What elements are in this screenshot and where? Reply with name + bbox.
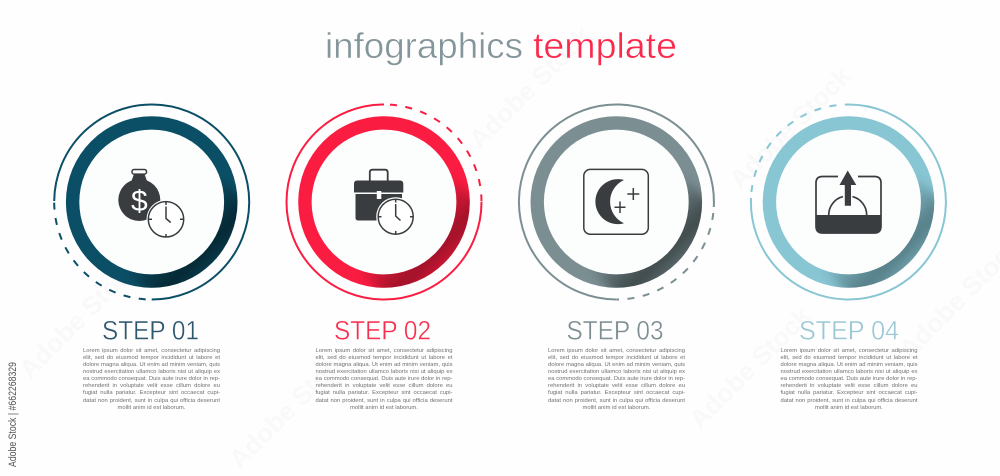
icon: gauge with up arrow [816, 170, 881, 233]
text block: step 03: nostrud exercitation ullamco laboris nisi ut aliquip ex [548, 369, 685, 375]
text block: step 04: mollit anim id est laborum. [815, 405, 883, 411]
step 02 heading: STEP 02 [334, 316, 431, 346]
text block: step 03: mollit anim id est laborum. [583, 405, 650, 411]
watermark: Adobe Stock [223, 340, 357, 474]
panel: step 04 circle [750, 104, 947, 300]
text block: step 01: nostrud exercitation ullamco laboris nisi ut aliquip ex [83, 369, 220, 375]
text block: step 02: Lorem ipsum dolor sit amet, consectetur adipiscing [316, 348, 452, 354]
text block: step 04: fugiat nulla pariatur. Excepteur sint occaecat cupi- [780, 390, 918, 396]
watermark: Adobe Stock [13, 250, 147, 384]
step 03 heading: STEP 03 [566, 316, 664, 346]
text block: step 02: fugiat nulla pariatur. Excepteur sint occaecat cupi- [316, 390, 452, 396]
text block: step 01: elit, sed do eiusmod tempor incididunt ut labore et [83, 355, 220, 361]
text block: step 04 [780, 348, 918, 411]
text block: step 01 [83, 348, 220, 411]
text block: step 03: fugiat nulla pariatur. Excepteur sint occaecat cupi- [548, 390, 685, 396]
watermark: Adobe Stock [683, 300, 817, 434]
text block: step 01: rehenderit in voluptate velit esse cillum dolore eu [83, 383, 220, 389]
icon: money bag with clock [118, 170, 186, 239]
text block: step 02: elit, sed do eiusmod tempor incididunt ut labore et [316, 355, 452, 361]
text block: step 01: dolore magna aliqua. Ut enim ad minim veniam, quis [83, 362, 220, 368]
text block: step 01: ea commodo consequat. Duis aute irure dolor in rep- [83, 376, 220, 382]
text block: step 02: nostrud exercitation ullamco laboris nisi ut aliquip ex [316, 369, 452, 375]
icon: briefcase with clock [354, 170, 415, 236]
text block: step 04: ea commodo consequat. Duis aute irure dolor in rep- [780, 376, 918, 382]
text block: step 01: datat non proident, sunt in culpa qui officia deserunt [83, 398, 220, 404]
text block: step 03: rehenderit in voluptate velit esse cillum dolore eu [548, 383, 685, 389]
text block: step 02 [316, 348, 452, 411]
text block: step 03: dolore magna aliqua. Ut enim ad minim veniam, quis [548, 362, 685, 368]
text block: step 02: ea commodo consequat. Duis aute irure dolor in rep- [316, 376, 452, 382]
text block: step 02: dolore magna aliqua. Ut enim ad minim veniam, quis [316, 362, 452, 368]
text block: step 01: fugiat nulla pariatur. Excepteur sint occaecat cupi- [83, 390, 220, 396]
text block: step 04: dolore magna aliqua. Ut enim ad minim veniam, quis [780, 362, 918, 368]
text block: step 02: mollit anim id est laborum. [350, 405, 418, 411]
text block: step 03: elit, sed do eiusmod tempor incididunt ut labore et [548, 355, 685, 361]
title: infographics [325, 25, 523, 66]
step 01 heading: STEP 01 [102, 316, 199, 346]
text block: step 04: nostrud exercitation ullamco laboris nisi ut aliquip ex [780, 369, 918, 375]
watermark: Adobe Stock [723, 60, 857, 194]
text block: step 03 [548, 348, 685, 411]
text block: step 04: datat non proident, sunt in culpa qui officia deserunt [780, 398, 918, 404]
stock credit: Adobe Stock | #662268329 [7, 362, 19, 467]
text block: step 04: rehenderit in voluptate velit esse cillum dolore eu [780, 383, 918, 389]
panel: step 02 circle [286, 104, 482, 300]
text block: step 01: Lorem ipsum dolor sit amet, consectetur adipiscing [83, 348, 220, 354]
text block: step 04: Lorem ipsum dolor sit amet, consectetur adipiscing [780, 348, 918, 354]
step 04 heading: STEP 04 [799, 316, 899, 346]
icon: moon and stars [584, 169, 648, 234]
panel: step 01 circle [53, 104, 250, 300]
text block: step 03: ea commodo consequat. Duis aute irure dolor in rep- [548, 376, 685, 382]
title accent word: template [533, 25, 677, 66]
text block: step 03: datat non proident, sunt in culpa qui officia deserunt [548, 398, 685, 404]
text block: step 03: Lorem ipsum dolor sit amet, consectetur adipiscing [548, 348, 685, 354]
watermark: Adobe Stock [463, 20, 597, 154]
icon: money bag with clock: $ [131, 185, 148, 218]
text block: step 02: rehenderit in voluptate velit esse cillum dolore eu [316, 383, 452, 389]
panel: step 03 circle [518, 104, 715, 300]
text block: step 02: datat non proident, sunt in culpa qui officia deserunt [316, 398, 452, 404]
text block: step 04: elit, sed do eiusmod tempor incididunt ut labore et [780, 355, 918, 361]
text block: step 01: mollit anim id est laborum. [118, 405, 185, 411]
